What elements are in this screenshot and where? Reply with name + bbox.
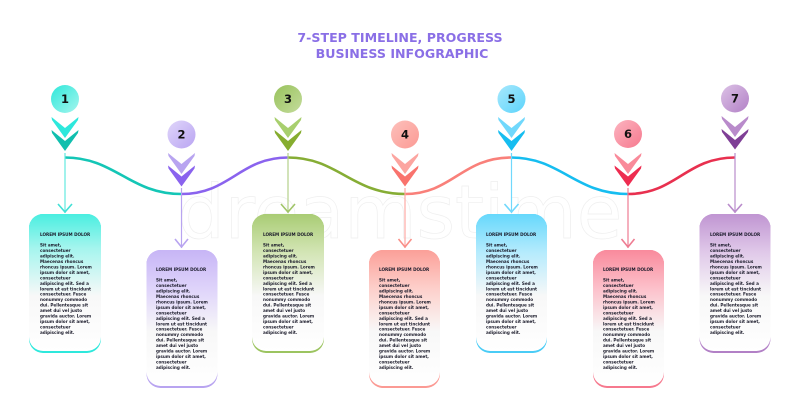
icon: double chevron 6 xyxy=(614,153,642,186)
panel: step 4: consectetuer. Fusce xyxy=(379,327,425,332)
panel: step 5: LOREM IPSUM DOLOR xyxy=(486,232,537,237)
panel: step 2: consectetuer. Fusce xyxy=(156,327,202,332)
panel: step 3: adipiscing elit. xyxy=(263,330,298,335)
panel: step 1: dui. Pellentesque sit xyxy=(40,303,88,308)
panel: step 1: consectetuer xyxy=(40,248,71,253)
panel: step 4 xyxy=(369,250,440,388)
panel: step 4: adipiscing elit. xyxy=(379,365,414,370)
panel: step 6 xyxy=(593,250,664,388)
panel: step 4: LOREM IPSUM DOLOR xyxy=(379,267,430,272)
panel: step 4: rhoncus ipsum. Lorem xyxy=(379,299,431,304)
panel: step 3: rhoncus ipsum. Lorem xyxy=(263,264,315,269)
icon: number circle 4: 4 xyxy=(401,128,409,142)
panel: step 1: Sit amet, xyxy=(40,242,62,248)
panel: step 2: consectetuer xyxy=(156,283,187,288)
panel: step 6: amet dui vel justo xyxy=(603,343,645,348)
panel: step 5: ipsum dolor sit amet, xyxy=(486,319,536,324)
panel: step 3: ipsum dolor sit amet, xyxy=(263,270,313,275)
icon: double chevron 4 xyxy=(392,153,418,186)
step 1 marker xyxy=(51,85,79,213)
icon: number circle 2: 2 xyxy=(177,128,186,142)
panel: step 6: LOREM IPSUM DOLOR xyxy=(603,267,654,272)
panel: step 2: adipiscing elit. xyxy=(156,365,191,370)
panel: step 2: Sit amet, xyxy=(156,278,178,282)
panel: step 5: consectetuer. Fusce xyxy=(486,292,532,297)
panel: step 5: Maecenas rhoncus xyxy=(486,259,530,264)
panel: step 2: gravida auctor. Lorem xyxy=(156,349,207,354)
panel: step 2: lorem ut est tincidunt xyxy=(156,321,207,326)
panel: step 5: adipiscing elit. Sed a xyxy=(486,281,535,286)
panel: step 1: rhoncus ipsum. Lorem xyxy=(40,264,92,269)
arrow 2 xyxy=(175,188,188,248)
panel: step 7: consectetuer. Fusce xyxy=(710,292,756,297)
panel: step 3: LOREM IPSUM DOLOR xyxy=(263,232,314,237)
panel: step 3: consectetuer xyxy=(263,248,294,253)
panel: step 2: adipiscing elit. xyxy=(156,288,191,293)
wavy timeline xyxy=(65,158,735,194)
panel: step 6: gravida auctor. Lorem xyxy=(603,349,654,354)
panel: step 3 xyxy=(252,214,324,353)
arrow 7 xyxy=(728,153,742,213)
panel: step 1: ipsum dolor sit amet, xyxy=(40,270,90,275)
icon: double chevron 3 xyxy=(274,117,302,151)
panel: step 1: Maecenas rhoncus xyxy=(40,259,84,264)
panel: step 5: dui. Pellentesque sit xyxy=(486,303,534,308)
panel: step 6: Sit amet, xyxy=(603,278,625,282)
panel: step 4: nonummy commodo xyxy=(379,332,426,337)
panel: step 7: lorem ut est tincidunt xyxy=(710,286,761,291)
panel: step 4: consectetuer xyxy=(379,310,410,315)
panel: step 5: consectetuer xyxy=(486,275,517,280)
step 3 marker xyxy=(274,85,302,213)
panel: step 6: consectetuer xyxy=(603,310,634,315)
panel: step 3: gravida auctor. Lorem xyxy=(263,314,314,319)
panel: step 1: adipiscing elit. xyxy=(40,253,75,258)
panel: step 7: Sit amet, xyxy=(710,242,732,248)
icon: number circle 7: 7 xyxy=(731,92,739,106)
panel: step 3: consectetuer xyxy=(263,325,294,330)
panel: step 1: consectetuer xyxy=(40,325,71,330)
panel: step 7 xyxy=(700,214,770,353)
panel: step 5: adipiscing elit. xyxy=(486,253,521,258)
panel: step 2: nonummy commodo xyxy=(156,332,203,337)
panel: step 3: consectetuer. Fusce xyxy=(263,292,309,297)
panel: step 7: adipiscing elit. xyxy=(710,253,745,258)
panel: step 2: consectetuer xyxy=(156,310,187,315)
panel: step 3: ipsum dolor sit amet, xyxy=(263,319,313,324)
title xyxy=(297,30,503,61)
panel: step 2: ipsum dolor sit amet, xyxy=(156,354,206,359)
panel: step 5 xyxy=(476,214,547,353)
panel: step 4: lorem ut est tincidunt xyxy=(379,321,430,326)
panel: step 6: consectetuer xyxy=(603,360,634,365)
panel: step 2: LOREM IPSUM DOLOR xyxy=(156,267,207,272)
panel: step 2: adipiscing elit. Sed a xyxy=(156,316,205,321)
panel: step 5: Sit amet, xyxy=(486,242,508,248)
panel: step 4: amet dui vel justo xyxy=(379,343,421,348)
panel: step 3: Maecenas rhoncus xyxy=(263,259,307,264)
panel: step 7: amet dui vel justo xyxy=(710,308,752,313)
arrow 5 xyxy=(504,153,518,213)
step 7 marker xyxy=(721,84,749,213)
panel: step 5: amet dui vel justo xyxy=(486,308,528,313)
panel: step 1: amet dui vel justo xyxy=(40,308,82,313)
panel: step 2: ipsum dolor sit amet, xyxy=(156,305,206,310)
panel: step 1: gravida auctor. Lorem xyxy=(40,314,91,319)
step 6 marker xyxy=(614,120,642,248)
title: BUSINESS INFOGRAPHIC xyxy=(316,46,488,61)
panel: step 4: ipsum dolor sit amet, xyxy=(379,305,429,310)
panel: step 6: adipiscing elit. xyxy=(603,365,638,370)
panel: step 6: ipsum dolor sit amet, xyxy=(603,354,653,359)
panel: step 5: ipsum dolor sit amet, xyxy=(486,270,536,275)
panel: step 4: gravida auctor. Lorem xyxy=(379,349,430,354)
panel: step 7: LOREM IPSUM DOLOR xyxy=(710,232,761,237)
panel: step 6: Maecenas rhoncus xyxy=(603,294,647,299)
panel: step 1: adipiscing elit. xyxy=(40,330,75,335)
panel: step 3: consectetuer xyxy=(263,275,294,280)
panel: step 4: Sit amet, xyxy=(379,278,401,282)
panel: step 2: Maecenas rhoncus xyxy=(156,294,200,299)
panel: step 2 xyxy=(146,250,218,388)
panel: step 7: nonummy commodo xyxy=(710,297,757,302)
panel: step 7: adipiscing elit. xyxy=(710,330,745,335)
arrow 1 xyxy=(58,153,72,213)
panel: step 7: consectetuer xyxy=(710,325,741,330)
panel: step 6: lorem ut est tincidunt xyxy=(603,321,654,326)
panel: step 5: nonummy commodo xyxy=(486,297,533,302)
panel: step 6: consectetuer. Fusce xyxy=(603,327,649,332)
icon: double chevron 7 xyxy=(722,116,748,150)
icon: double chevron 2 xyxy=(168,153,195,186)
panel: step 7: rhoncus ipsum. Lorem xyxy=(710,264,762,269)
panel: step 3: nonummy commodo xyxy=(263,297,310,302)
panel: step 6: adipiscing elit. xyxy=(603,288,638,293)
panel: step 2: amet dui vel justo xyxy=(156,343,198,348)
panel: step 3: adipiscing elit. xyxy=(263,253,298,258)
panel: step 1: nonummy commodo xyxy=(40,297,87,302)
panel: step 7: ipsum dolor sit amet, xyxy=(710,319,760,324)
panel: step 7: adipiscing elit. Sed a xyxy=(710,281,759,286)
arrow 4 xyxy=(398,188,412,248)
arrow 6 xyxy=(622,188,634,248)
panel: step 7: Maecenas rhoncus xyxy=(710,259,754,264)
title: 7-STEP TIMELINE, PROGRESS xyxy=(297,30,503,45)
panel: step 1: ipsum dolor sit amet, xyxy=(40,319,90,324)
panel: step 1: consectetuer xyxy=(40,275,71,280)
panel: step 4: dui. Pellentesque sit xyxy=(379,338,427,343)
panel: step 6: consectetuer xyxy=(603,283,634,288)
panel: step 3: dui. Pellentesque sit xyxy=(263,303,311,308)
step 2 marker xyxy=(168,120,196,248)
step 5 marker xyxy=(498,85,526,213)
icon: number circle 3: 3 xyxy=(284,92,292,106)
panel: step 6: adipiscing elit. Sed a xyxy=(603,316,652,321)
icon: double chevron 5 xyxy=(498,117,525,151)
panel: step 3: Sit amet, xyxy=(263,242,285,248)
icon: number circle 6: 6 xyxy=(624,127,632,141)
panel: step 5: adipiscing elit. xyxy=(486,330,521,335)
panel: step 4: ipsum dolor sit amet, xyxy=(379,354,429,359)
arrow 3 xyxy=(281,153,295,213)
panel: step 2: dui. Pellentesque sit xyxy=(156,338,204,343)
text: dreamstime xyxy=(178,170,622,256)
panel: step 7: dui. Pellentesque sit xyxy=(710,303,758,308)
panel: step 3: amet dui vel justo xyxy=(263,308,305,313)
panel: step 6: dui. Pellentesque sit xyxy=(603,338,651,343)
panel: step 4: adipiscing elit. Sed a xyxy=(379,316,428,321)
icon: number circle 1: 1 xyxy=(61,92,69,106)
panel: step 4: Maecenas rhoncus xyxy=(379,294,423,299)
panel: step 7: gravida auctor. Lorem xyxy=(710,314,761,319)
icon: double chevron 1 xyxy=(52,117,78,151)
panel: step 4: consectetuer xyxy=(379,360,410,365)
panel: step 7: consectetuer xyxy=(710,275,741,280)
panel: step 1: adipiscing elit. Sed a xyxy=(40,281,89,286)
panel: step 5: rhoncus ipsum. Lorem xyxy=(486,264,538,269)
panel: step 5: lorem ut est tincidunt xyxy=(486,286,537,291)
panel: step 1: consectetuer. Fusce xyxy=(40,292,86,297)
panel: step 3: adipiscing elit. Sed a xyxy=(263,281,312,286)
panel: step 7: ipsum dolor sit amet, xyxy=(710,270,760,275)
panel: step 2: consectetuer xyxy=(156,360,187,365)
step 4 marker xyxy=(391,120,419,248)
panel: step 5: consectetuer xyxy=(486,248,517,253)
panel: step 3: lorem ut est tincidunt xyxy=(263,286,314,291)
panel: step 6: nonummy commodo xyxy=(603,332,650,337)
panel: step 5: consectetuer xyxy=(486,325,517,330)
panel: step 2: rhoncus ipsum. Lorem xyxy=(156,299,208,304)
panel: step 6: ipsum dolor sit amet, xyxy=(603,305,653,310)
panel: step 1: LOREM IPSUM DOLOR xyxy=(40,232,91,237)
panel: step 1 xyxy=(29,214,101,353)
panel: step 1: lorem ut est tincidunt xyxy=(40,286,91,291)
panel: step 6: rhoncus ipsum. Lorem xyxy=(603,299,655,304)
panel: step 4: adipiscing elit. xyxy=(379,288,414,293)
panel: step 5: gravida auctor. Lorem xyxy=(486,314,537,319)
panel: step 7: consectetuer xyxy=(710,248,741,253)
panel: step 4: consectetuer xyxy=(379,283,410,288)
icon: number circle 5: 5 xyxy=(507,92,516,106)
